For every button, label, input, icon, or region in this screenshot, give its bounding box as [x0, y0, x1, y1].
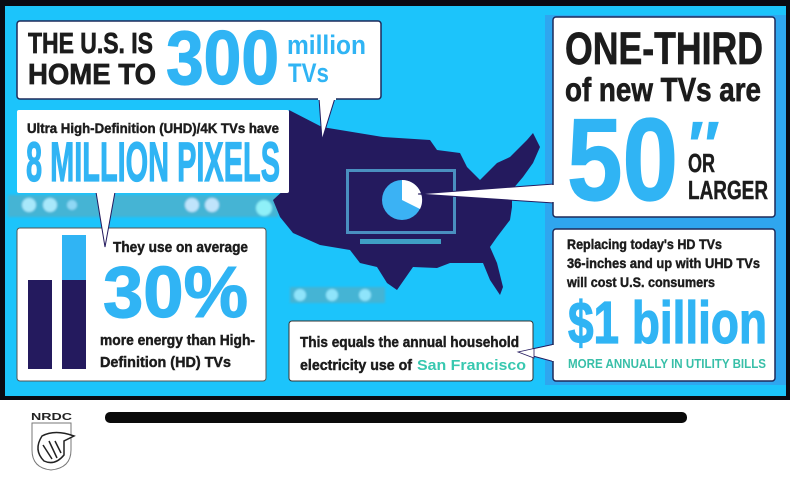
panel: one-third of new TVs — [552, 17, 775, 225]
logo: NRDC shield — [31, 412, 74, 470]
text: equals household electricity: This equals the annual household — [300, 334, 519, 351]
text: they use on average: They use on average — [113, 240, 248, 256]
pie chart: one-third share — [382, 180, 422, 220]
bar chart: HD vs UHD energy — [28, 235, 86, 369]
panel: $1 billion — [552, 229, 775, 381]
big number: 50 inches: 50 — [567, 94, 678, 225]
big number: 8 million pixels: 8 MILLION PIXELS — [26, 130, 280, 193]
panel: 300 million TVs — [17, 16, 381, 140]
footer bar — [105, 412, 687, 423]
highlighted place name: San Francisco — [417, 357, 526, 374]
text: replacing HD TVs: Replacing today's HD TVs — [567, 236, 722, 252]
callout pointer: pie to one-third panel — [418, 184, 554, 203]
map: United States — [273, 110, 540, 295]
label: million TVs: million — [287, 30, 366, 60]
panel: one-third of new TVs: ″ — [688, 107, 720, 185]
logo: NRDC shield: NRDC — [31, 412, 72, 423]
panel: $1 billion: will cost U.S. consumers — [566, 274, 715, 290]
big number: 300: 300 — [166, 16, 279, 101]
label: more annually in utility bills: MORE ANNUALLY IN UTILITY BILLS — [568, 357, 766, 371]
subheading: of new TVs are: of new TVs are — [565, 71, 761, 108]
panel: 300 million TVs: TVs — [288, 58, 329, 88]
text: more energy than HD: more energy than High- — [100, 333, 255, 349]
panel: $1 billion: 36-inches and up with UHD TVs — [567, 255, 760, 271]
panel: 30% more energy: Definition (HD) TVs — [100, 355, 231, 371]
panel: 300 million TVs: HOME TO — [28, 59, 156, 91]
panel: household electricity: electricity use of — [300, 357, 413, 374]
text: UHD intro: Ultra High-Definition (UHD)/4K TVs have — [27, 120, 279, 136]
panel: household electricity — [289, 321, 534, 381]
label: or larger: OR — [688, 148, 715, 178]
callout pointer: household panel to billion panel — [518, 344, 555, 362]
heading: the U.S. is home to: THE U.S. IS — [28, 28, 153, 60]
dotted pattern: lower band — [290, 287, 385, 303]
big number: 30%: 30% — [103, 253, 248, 333]
panel: 30% more energy — [17, 228, 266, 381]
panel: 8 million pixels — [17, 110, 289, 247]
dotted pattern: left band — [8, 195, 278, 217]
icon: television on the map — [348, 170, 454, 244]
